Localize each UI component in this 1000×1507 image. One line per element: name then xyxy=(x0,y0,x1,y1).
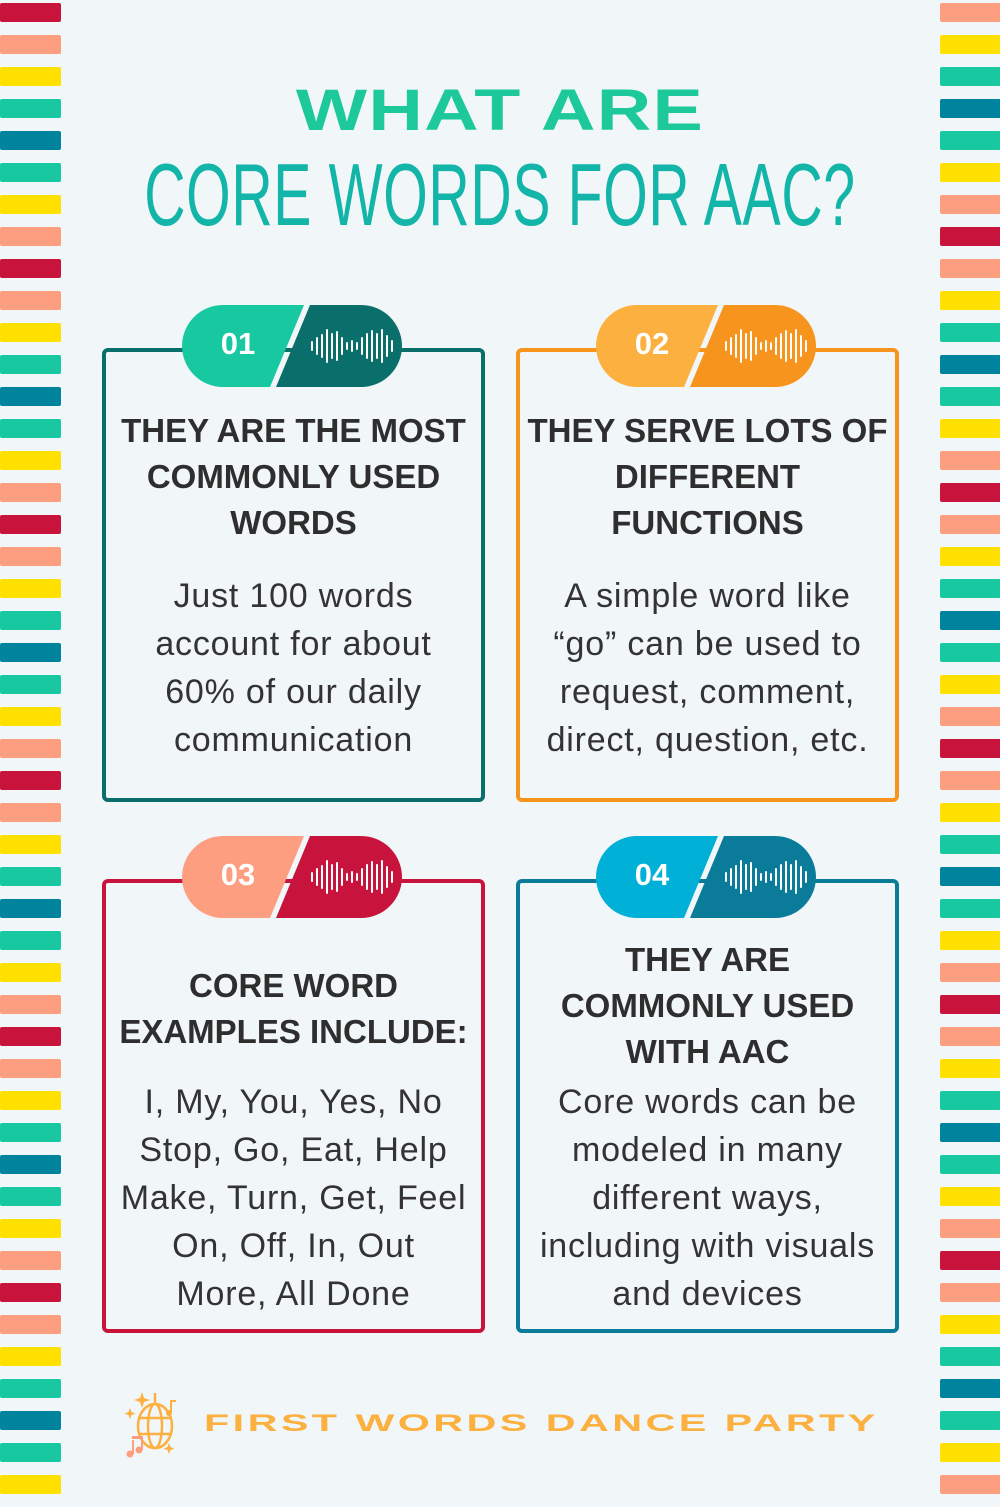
footer text: FIRST WORDS DANCE PARTY xyxy=(204,1410,879,1437)
body 02: request, comment, xyxy=(560,673,855,711)
title line 2: CORE WORDS FOR AAC? xyxy=(144,145,856,244)
body 04: including with visuals xyxy=(540,1227,875,1265)
heading 03: EXAMPLES INCLUDE: xyxy=(119,1013,468,1050)
body 03: More, All Done xyxy=(176,1275,411,1313)
heading 04: THEY ARE xyxy=(625,941,790,978)
heading 03 xyxy=(119,967,468,1050)
body 04: and devices xyxy=(612,1275,803,1313)
heading 02: DIFFERENT xyxy=(615,458,800,495)
body 02 xyxy=(547,577,868,759)
body 01: 60% of our daily xyxy=(165,673,422,711)
heading 01: THEY ARE THE MOST xyxy=(121,412,466,449)
badge 04 xyxy=(596,836,816,918)
heading 04: COMMONLY USED xyxy=(561,987,854,1024)
body 04 xyxy=(540,1083,875,1313)
body 02: direct, question, etc. xyxy=(547,721,868,759)
heading 02 xyxy=(527,412,888,541)
heading 01: WORDS xyxy=(230,504,357,541)
body 04: Core words can be xyxy=(558,1083,857,1121)
heading 01: COMMONLY USED xyxy=(147,458,440,495)
body 03 xyxy=(121,1083,466,1313)
body 03: Stop, Go, Eat, Help xyxy=(139,1131,448,1169)
badge 03 xyxy=(182,836,402,918)
body 01: communication xyxy=(174,721,413,759)
body 04: modeled in many xyxy=(572,1131,843,1169)
body 01: account for about xyxy=(155,625,432,663)
heading 02: FUNCTIONS xyxy=(611,504,804,541)
body 04: different ways, xyxy=(592,1179,823,1217)
body 01 xyxy=(155,577,432,759)
badge 01 xyxy=(182,305,402,387)
body 02: A simple word like xyxy=(564,577,851,615)
footer logo xyxy=(124,1392,879,1458)
title line 1: WHAT ARE xyxy=(296,78,704,143)
icon: disco ball xyxy=(124,1392,176,1458)
heading 02: THEY SERVE LOTS OF xyxy=(527,412,888,449)
body 02: “go” can be used to xyxy=(553,625,862,663)
badge 01: 01 xyxy=(221,326,255,361)
badge 02: 02 xyxy=(635,326,669,361)
body 03: Make, Turn, Get, Feel xyxy=(121,1179,466,1217)
body 03: On, Off, In, Out xyxy=(172,1227,415,1265)
decorative stripes left xyxy=(0,3,61,1494)
panel: card 03 xyxy=(102,879,485,1333)
badge 02 xyxy=(596,305,816,387)
heading 01 xyxy=(121,412,466,541)
heading 03: CORE WORD xyxy=(189,967,398,1004)
panel: card 01 xyxy=(102,348,485,802)
heading 04 xyxy=(561,941,854,1070)
badge 03: 03 xyxy=(221,857,255,892)
heading 04: WITH AAC xyxy=(626,1033,789,1070)
panel: card 04 xyxy=(516,879,899,1333)
body 03: I, My, You, Yes, No xyxy=(144,1083,443,1121)
decorative stripes right xyxy=(940,3,1000,1494)
body 01: Just 100 words xyxy=(174,577,413,615)
panel: card 02 xyxy=(516,348,899,802)
title xyxy=(144,78,856,244)
badge 04: 04 xyxy=(635,857,670,892)
